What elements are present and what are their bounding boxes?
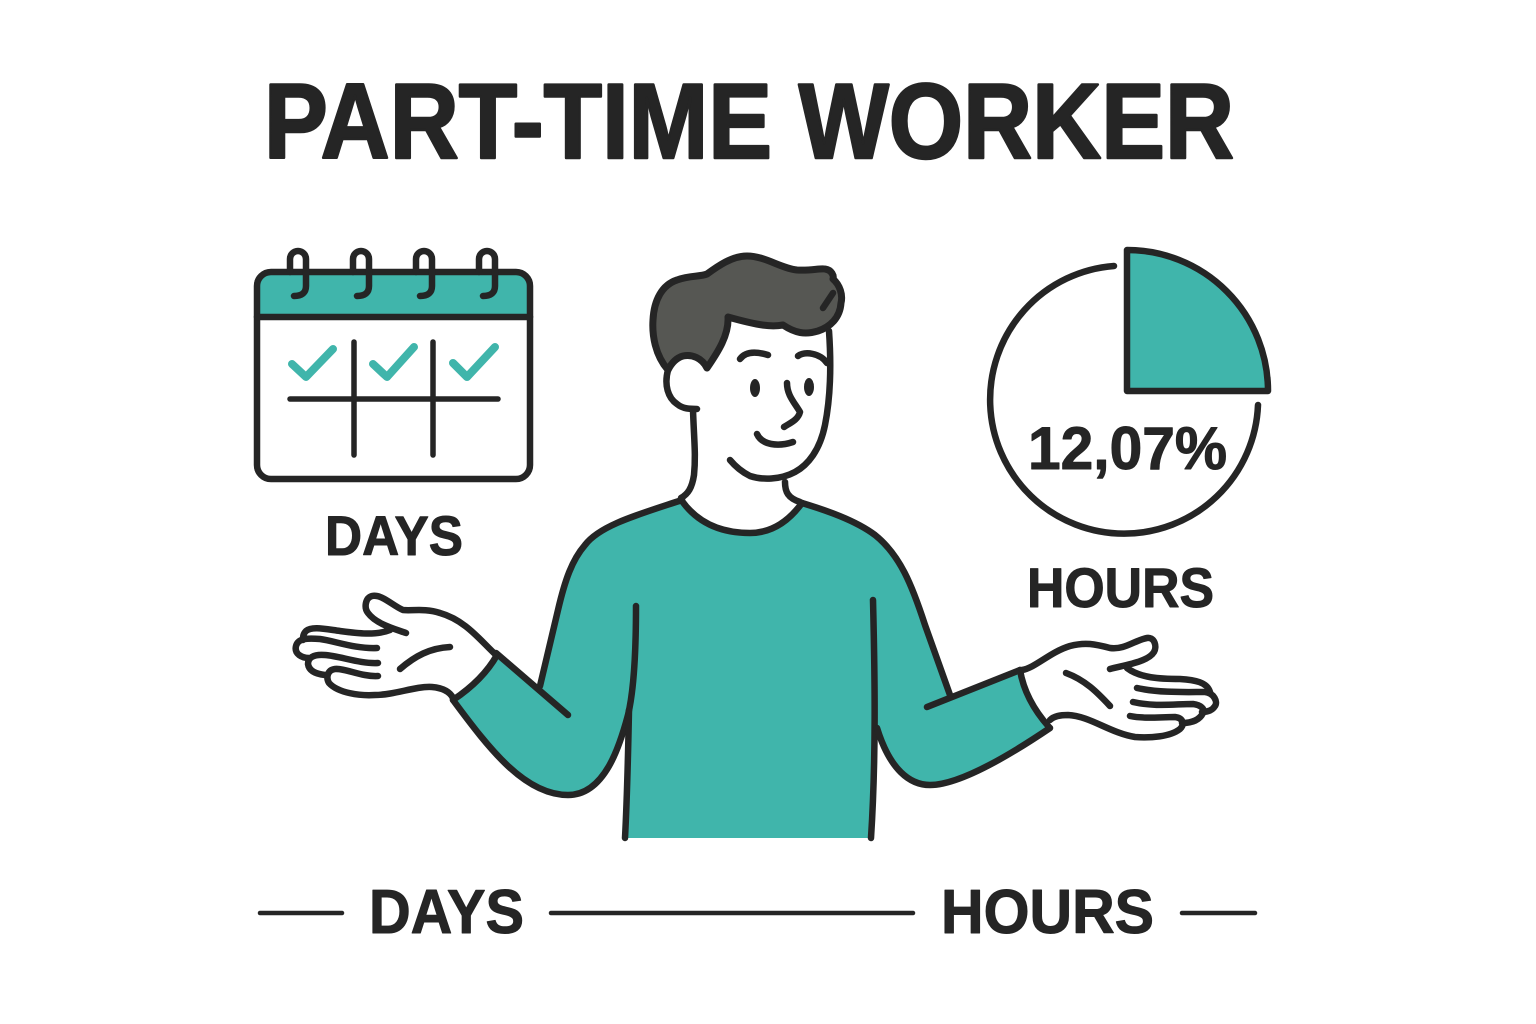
scale lines (260, 911, 1255, 915)
label: hours: HOURS (1027, 556, 1214, 619)
label: days: DAYS (325, 504, 463, 567)
icon: calendar frame (257, 272, 530, 479)
pie value: 12,07% (1028, 415, 1227, 482)
scale label: hours: HOURS (941, 878, 1154, 947)
icon: check marks (292, 347, 495, 377)
calendar grid (290, 342, 498, 455)
face outline (666, 293, 833, 502)
scale label: days: DAYS (369, 878, 524, 947)
pie wedge (1127, 250, 1268, 391)
right hand (1022, 638, 1216, 737)
left hand (296, 596, 495, 698)
panel: hours pie chart (990, 250, 1268, 619)
head and face (653, 256, 842, 502)
pie outline (990, 266, 1258, 534)
icon: calendar header band (257, 272, 530, 317)
person illustration (296, 256, 1216, 838)
icon: calendar rings (290, 251, 495, 296)
hair (653, 256, 842, 370)
panel: days calendar (257, 251, 530, 567)
sweater (453, 500, 1050, 838)
eyes (750, 378, 814, 397)
bottom scale: days to hours (260, 878, 1255, 947)
title: PART-TIME WORKER (264, 61, 1234, 181)
